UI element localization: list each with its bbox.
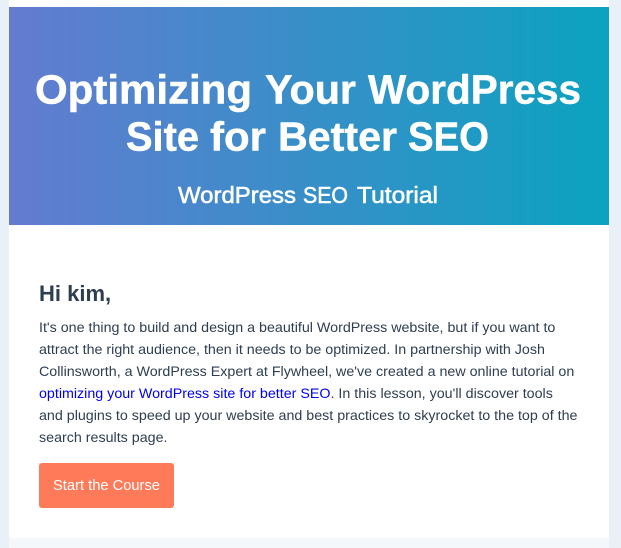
banner: Tutorial <box>357 182 438 208</box>
button: Start the Course <box>39 463 174 508</box>
banner: Your <box>265 66 356 112</box>
banner: for <box>210 114 266 160</box>
banner: SEO <box>303 182 348 208</box>
body paragraph: and plugins to speed up your website and best practices to skyrocket to the top of the <box>39 408 577 424</box>
banner: WordPress <box>178 182 296 208</box>
banner <box>9 7 609 225</box>
banner: WordPress <box>368 66 581 112</box>
body paragraph <box>39 320 577 446</box>
body paragraph: search results page. <box>39 430 167 446</box>
body paragraph: It's one thing to build and design a beautiful WordPress website, but if you want to <box>39 320 555 336</box>
button: Start the Course: Start the Course <box>53 478 160 494</box>
body paragraph: Collinsworth, a WordPress Expert at Flywheel, we've created a new online tutorial on <box>39 364 574 380</box>
body paragraph: optimizing your WordPress site for better SEO. In this lesson, you'll discover tools <box>39 386 553 402</box>
banner: Better <box>278 114 397 160</box>
footer strip <box>9 538 609 548</box>
body paragraph: attract the right audience, then it needs to be optimized. In partnership with Josh <box>39 342 545 358</box>
banner: Site <box>126 114 199 160</box>
banner: SEO <box>408 114 489 160</box>
banner: Optimizing <box>35 66 252 112</box>
greeting heading: Hi kim, <box>39 281 111 306</box>
